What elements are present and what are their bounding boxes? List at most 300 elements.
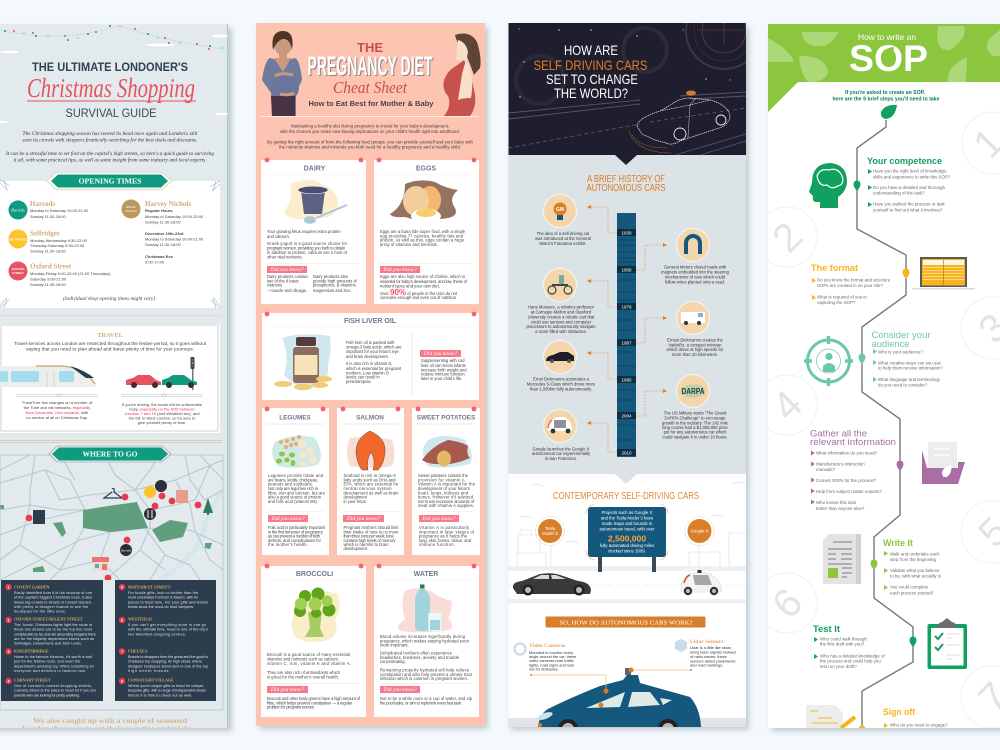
opening note: (Individual shop opening times might vary): [63, 297, 155, 302]
milestone text: Mercedes S-Class which drove more: [527, 382, 596, 386]
banner: opening times: OPENING TIMES: [78, 178, 142, 186]
label: lidar sensors: sensors detect pavements: [690, 658, 735, 663]
milestone text: Hans Moravec, a robotics professor: [528, 304, 595, 310]
panel: travel: [0, 324, 220, 433]
shop: Selfridges: Sunday 11:30-18:00: [30, 248, 67, 254]
panel: where to go map: [0, 446, 223, 710]
card: dairy: in addition to protein, calcium are a host of: [267, 250, 348, 255]
list: left locations: 4: [8, 679, 10, 683]
header: dark hero: [508, 23, 746, 156]
step: test it: [813, 624, 885, 669]
card: salmon: development.: [344, 546, 368, 551]
milestone text: [526, 231, 730, 461]
card: broccoli: Did you know?: [270, 687, 304, 693]
card: dairy: provide high amounts of: [313, 278, 358, 283]
step: test it: Who has a detailed knowledge of: [820, 654, 885, 658]
step: consider your audience: Consider your: [872, 330, 930, 341]
step: the format: SOPs are created in on your site?: [817, 283, 883, 288]
list: right locations: CHELSEA: [128, 648, 147, 654]
step: the format: [811, 263, 891, 305]
shop: Oxford Street: Sunday 11:30-18:00: [30, 282, 67, 287]
shop: Harvey Nichols: Christmas Eve: [145, 254, 174, 259]
panel: self driving cars: [508, 23, 746, 727]
card: broccoli: Broccoli is a good source of many essential: [267, 652, 350, 657]
shop: Selfridges: Selfridges: [30, 230, 60, 238]
icon: sedan: [546, 352, 574, 363]
route line: [854, 105, 916, 731]
card: salmon: EPA, which are essential for: [344, 482, 399, 487]
shop: Selfridges: Monday-Wednesday 9:30-22:00: [30, 238, 88, 243]
milestone text: in San Francisco.: [545, 456, 577, 461]
intro text: By getting the right amount of from the following food groups, you can provide yourself and your baby with: [267, 140, 474, 144]
label: lidar sensors: and road markings.: [690, 662, 723, 668]
travel text: train: There'll be few changes on a number of: [22, 400, 93, 405]
card: salmon: SALMON: [356, 414, 384, 422]
list: left locations: with plenty of designer brands to see the: [14, 605, 88, 609]
card: sweet potatoes: SWEET POTATOES: [417, 414, 476, 422]
card: eggs: Eggs are also high source of choline, which is: [380, 274, 465, 279]
card: dairy: phosphorus, B vitamins,: [313, 283, 357, 288]
card: fish liver oil: which is essential for pregnant: [346, 366, 402, 371]
intro text: seen its crowds with shoppers frantically searching for the best deals and discounts.: [22, 138, 198, 144]
step: write it: step from the beginning: [890, 557, 936, 562]
step: gather information: relevant information: [810, 437, 896, 448]
travel intro: Travel services across London are restricted throughout the festive period, so it goes without: [14, 341, 207, 346]
step: sign off: Sign off: [883, 707, 916, 718]
milestone text: Ernst Dickmanns automates a: [533, 376, 590, 382]
title: How to Eat Best for Mother & Baby: [308, 99, 434, 108]
card: legumes: peanuts and soybeans.: [268, 482, 313, 487]
illustration: salmon: [347, 431, 394, 470]
illustration: woman right: [444, 34, 481, 116]
illustration: yoghurt: [284, 180, 347, 224]
step: consider your audience: What language and terminology: [878, 377, 941, 382]
closing text: We also caught up with a couple of seasoned: [33, 717, 187, 725]
title: [27, 60, 196, 120]
card: salmon: development as well as brain: [344, 490, 399, 495]
card: salmon: which is harmful to brain: [344, 542, 389, 547]
card: salmon: in your fetus.: [344, 499, 367, 504]
panel: pregnancy diet cheat sheet: [256, 23, 485, 726]
milestone text: DARPA Challenge" to encourage: [664, 416, 726, 420]
label: video cameras: angle around the car, these: [529, 654, 576, 659]
title: Cheat Sheet: [333, 78, 408, 97]
card: fish liver oil: reduce immune function: [421, 372, 465, 377]
card: salmon: contains high levels of mercury: [344, 538, 396, 543]
step: test it: Who could walk through: [820, 636, 867, 642]
step: the format: capturing the SOP?: [817, 300, 856, 305]
title: [534, 46, 647, 98]
milestone text: Ernest Dickmanns creates the: [667, 338, 724, 342]
step: consider your audience: audience: [872, 339, 910, 350]
shop: Harvey Nichols: [122, 200, 204, 264]
list: left locations: are for the flagship department stores such as: [14, 637, 94, 641]
milestone text: Google launches the Google X: [532, 446, 590, 452]
card: water: Blood volume increases significantly during: [380, 634, 466, 639]
callout: Google X: Google X: [691, 528, 709, 534]
step: sign off: Who do you need to engage?: [890, 722, 948, 728]
list: left locations: Carnaby Street is the place to head for if you are: [14, 689, 96, 693]
card: dairy: other vital nutrients.: [267, 254, 303, 260]
step: your competence: yourself to find out what it involves?: [873, 208, 943, 212]
shop: Harvey Nichols: Monday to Saturday 10:00-20:00: [145, 214, 204, 219]
travel text: driving: busy, especially on the M25 between: [129, 406, 195, 412]
milestone text: growth in the industry. The 142 mile: [662, 420, 729, 426]
illustration: train: [0, 366, 96, 387]
title: PREGNANCY DIET: [308, 52, 434, 82]
step: your competence: Have you the right level of knowledge,: [873, 168, 947, 174]
map: [0, 455, 223, 581]
closing text: London shoppers to get their own tips and tricks: [22, 725, 192, 733]
list: right locations: [115, 580, 216, 701]
step: sign off: [883, 707, 948, 728]
shop: Harvey Nichols: 9:00-17:00: [145, 260, 165, 264]
step: consider your audience: Who is your audience?: [878, 350, 923, 354]
illustration: eggs: [390, 180, 458, 223]
card: salmon: [337, 407, 404, 555]
list: right locations: most celebrated Fortnum & Mason, with its: [128, 596, 198, 600]
card: salmon: than three cans per week, tuna: [344, 534, 394, 539]
shop: Harrods: Harrods: [10, 208, 25, 212]
card: dairy: Dairy products contain: [267, 274, 308, 279]
milestone text: at Carnegie Mellon and Stanford: [531, 310, 592, 314]
heading: brief history: A BRIEF HISTORY OF: [587, 174, 665, 185]
illustration: blue autonomous car: [508, 668, 746, 739]
list: left locations: of the capital's biggest Christmas trees, it also: [14, 596, 92, 600]
card: fish liver oil: omega-3 fatty acids, which are: [346, 345, 402, 350]
card: sweet potatoes: immune function.: [419, 542, 455, 547]
card: broccoli: They are also rich of antioxidants which: [267, 670, 341, 675]
step: the format: Do you know the format and structure: [817, 278, 891, 282]
fairy lights: [0, 25, 229, 123]
list: left locations: these two streets are to be the top five most: [14, 628, 92, 632]
list: left locations: everyone and delivers in fashion now.: [14, 669, 86, 673]
illustration: legumes: [272, 435, 321, 468]
list: left locations: boutiques for the little ones.: [14, 610, 66, 614]
card: dairy: pregnant women, providing you both to obtain: [267, 246, 346, 250]
card: dairy: vitamins: [267, 283, 282, 288]
card: dairy: Your growing fetus requires extra protein: [267, 229, 341, 234]
step: the format: What is required of you in: [817, 294, 867, 300]
milestone icons: [544, 194, 710, 442]
card: salmon: fatty acids such as DHA and: [344, 477, 396, 482]
milestone text: Motor's Futurama exhibit.: [539, 241, 587, 246]
card: fish liver oil: liver oil can boost infants: [421, 363, 466, 368]
step: your competence: Do you have a detailed and thorough: [873, 185, 946, 190]
road sign: fully automated driving miles: [600, 543, 654, 548]
travel intro: saying that you need to plan ahead and leave plenty of time for your journeys.: [26, 346, 194, 352]
intro text: The Christmas shopping season has reared its head once again and London's still: [22, 132, 198, 137]
list: right locations: designer boutiques stand next to one of the top: [128, 664, 208, 668]
step: write it: Walk and undertake each: [890, 552, 940, 556]
step: gather information: Manufacture's instruction: [816, 462, 865, 466]
card: legumes: Not only are legumes rich in: [268, 486, 319, 491]
card: sweet potatoes: [412, 407, 480, 555]
step: gather information: Gather all the: [810, 428, 867, 440]
header: SOP: [849, 38, 928, 79]
illustration: wireframe car: [629, 90, 730, 153]
list: left locations: OXFORD STREET/REGENT STREET: [14, 616, 83, 622]
milestone text: could navigate it in under 10 hours.: [662, 434, 728, 440]
panel: how to write an SOP: [757, 24, 1000, 731]
list: left locations: 1: [8, 585, 10, 589]
step: gather information: manuals?: [816, 467, 836, 472]
list: left locations: The 'Iconic' Christmas lights light the route in: [14, 623, 92, 627]
icon: van: [681, 312, 705, 325]
card: sweet potatoes: Vitamin A is important for the: [418, 482, 476, 487]
icon: audience target: [804, 336, 853, 386]
card: legumes: Did you know?: [270, 516, 305, 522]
card: water: concentrating.: [380, 659, 406, 664]
timeline: [617, 213, 636, 457]
subtitle: If you're asked to create an SOP,: [845, 90, 925, 96]
list: left locations: draws big crowds to streets of Covent Garden,: [14, 600, 92, 604]
step: consider your audience: to help them receive information?: [878, 366, 943, 370]
list: left locations: parents who are looking for pretty anything.: [14, 693, 80, 697]
card: broccoli: [261, 564, 366, 717]
card: broccoli: problem for pregnant women.: [267, 705, 315, 710]
list: right locations: 5: [121, 585, 123, 589]
shop: Selfridges: SELFRIDGES: [9, 238, 27, 242]
title: Christmas Shopping: [27, 73, 195, 103]
card: salmon: their intake of tuna to no more: [344, 529, 399, 534]
step: test it: Test It: [813, 624, 841, 635]
list: right locations: treats stock the must-do food hampers.: [128, 605, 194, 609]
title: SET TO CHANGE: [546, 71, 638, 87]
label: lidar sensors: of radio waves; these: [690, 654, 727, 659]
list: right locations: pieces to feast here. For your gifts and festive: [128, 600, 208, 604]
card: dairy: Dairy products also: [313, 274, 349, 279]
card: broccoli: fibre, which helps prevent constipation — a regular: [267, 700, 353, 705]
list: left locations: CARNABY STREET: [14, 678, 51, 682]
milestone text: The US Military starts "The Grand: [664, 410, 727, 416]
milestone text: processors to autonomously navigate: [526, 324, 596, 329]
step: test it: the process and could help you: [820, 658, 881, 664]
step: write it: You could complete: [890, 584, 929, 590]
button: how do autonomous cars work: SO, HOW DO AUTONOMOUS CARS WORK?: [560, 620, 693, 626]
milestone text: more than 20 kilometres.: [672, 352, 718, 357]
shop: Harrods: [8, 200, 89, 220]
card: legumes: and folic acid (vitamin B9).: [268, 499, 318, 504]
card: eggs: Eggs are a bona fide super food, with a single: [380, 229, 466, 234]
milestone text: General Motors closed roads with: [664, 264, 727, 270]
step: write it: Validate what you believe: [890, 568, 940, 573]
card: eggs: nutrient types and your own diet.: [380, 284, 440, 288]
card: water: infection which is common in pregnant women.: [380, 676, 468, 681]
intro text: it all, with some practical tips, as well as some insight from some industry and local experts.: [14, 158, 206, 164]
card: dairy: – muscle and ribcage.: [267, 288, 307, 293]
timeline: 1958: [621, 268, 632, 272]
icon: google car: [548, 417, 572, 433]
travel text: driving: If you're driving, the roads will be unfavorable: [122, 402, 203, 407]
step: test it: test run your draft?: [820, 664, 857, 669]
label: video cameras: lights, road signs and look: [529, 662, 574, 668]
icon: light bulb: [554, 202, 566, 220]
card: eggs: egg providing 77 calories, healthy fats and: [380, 233, 464, 238]
shop: Harvey Nichols: Sunday 11:30-18:00: [145, 220, 182, 224]
timeline: 1987: [621, 340, 632, 346]
intro text: Maintaining a healthy diet during pregnancy is crucial for your baby's development,: [291, 124, 449, 128]
milestone text: pot for any autonomous car which: [664, 430, 727, 434]
icon: signed paper: [806, 705, 855, 728]
card: legumes: Legumes provide folate and: [268, 473, 324, 478]
banner: opening times: [47, 172, 172, 190]
travel heading: TRAVEL: [97, 332, 123, 339]
icon: magnet: [686, 236, 700, 254]
callout: Google X: [685, 516, 714, 546]
list: right locations: 7: [121, 650, 123, 654]
callout: Tesla Model S: Tesla: [545, 526, 556, 531]
card: water: constipation and also help prevent a urinary tract: [380, 672, 473, 677]
illustration: sweet potato: [422, 436, 472, 468]
icon: head with brain: [809, 163, 847, 208]
list: left locations: department's amazing toy. Offers something for: [14, 664, 95, 668]
card: sweet potatoes: provision for vitamin A.: [418, 477, 466, 482]
road sign: autonomous travel, with over: [600, 526, 655, 532]
step: gather information: What information do you need?: [816, 450, 878, 456]
shop: Oxford Street: Monday-Friday 9:00-22:00 (21:00 Thursdays): [30, 271, 111, 276]
card: sweet potatoes: meat with Vitamin A supplies.: [418, 503, 474, 508]
road sign: and the Tesla Model 3 have: [601, 516, 654, 520]
list: left locations: 2: [8, 618, 10, 622]
card: legumes: Folic acid is particularly important: [268, 525, 326, 530]
milestone text: a room filled with obstacles.: [535, 329, 587, 334]
list: right locations: CONNAUGHT VILLAGE: [128, 678, 174, 682]
list: left locations: Home to the famous Harrods, it's worth a visit: [14, 655, 92, 659]
large step numbers: 2: [764, 214, 811, 261]
card: fish liver oil: later in your child's life.: [421, 376, 462, 381]
label: lidar sensors: using laser signals instead: [690, 650, 736, 654]
timeline: 1995: [621, 378, 632, 382]
timeline: 2004: [621, 414, 632, 418]
card: fish liver oil: It is also rich in vitamin D,: [346, 361, 392, 366]
label: video cameras: out for obstacles.: [529, 666, 559, 672]
shop: Harvey Nichols: Sunday 11:30-18:00: [145, 242, 182, 247]
list: left locations: KNIGHTSBRIDGE: [14, 648, 49, 654]
step: write it: Write It: [883, 538, 914, 549]
icon: document: [823, 534, 861, 584]
timeline: 1979: [621, 304, 632, 310]
road sign: clocked since 2009.: [608, 548, 646, 554]
list: right locations: two Westfield shopping centres.: [128, 632, 186, 636]
step: your competence: [867, 156, 951, 212]
card: fish liver oil: [262, 312, 479, 400]
card: eggs: essential for baby's development, and low, these of: [380, 279, 468, 284]
illustration: cars and traffic light: [126, 357, 197, 390]
ornament dividers: [16, 394, 203, 398]
milestone text: than 1,000km fully autonomously.: [530, 386, 592, 392]
title: THE WORLD?: [554, 85, 628, 101]
step: gather information: Help from subject matter experts?: [816, 489, 882, 494]
label: lidar sensors: [675, 639, 736, 668]
card: eggs: consume enough and even out of nutrition: [380, 295, 457, 300]
shop: Selfridges: Thursday-Saturday 9:30-22:00: [30, 243, 85, 248]
button: how do autonomous cars work: [546, 616, 706, 628]
step: gather information: [810, 428, 896, 511]
card: salmon: Did you know?: [346, 516, 380, 522]
card: broccoli: Broccoli and other leafy greens have a high amount of: [267, 696, 361, 701]
icon: tablet document: [912, 257, 975, 290]
icon: folder: [922, 442, 965, 484]
list: right locations: high street brands.: [128, 669, 170, 673]
timeline: 2010: [621, 450, 632, 456]
card: legumes: defects, and complications for: [268, 538, 322, 543]
connectors: [590, 207, 663, 452]
card: dairy: DAIRY: [304, 166, 326, 172]
card: water: Dehydrated mothers often experience: [380, 650, 453, 656]
travel text: train: [22, 400, 93, 420]
milestone text: The idea of a self-driving car: [537, 231, 590, 236]
list: right locations: with the ultimate time, head to one of the city's: [128, 628, 208, 632]
heading: brief history: AUTONOMOUS CARS: [586, 183, 666, 194]
card: water: headaches, tiredness, anxiety and trouble: [380, 655, 460, 660]
banner: where to go: WHERE TO GO: [82, 450, 138, 458]
card: legumes: LEGUMES: [279, 414, 312, 422]
travel text: train: no service at all on Christmas Day.: [26, 415, 88, 420]
card: legumes: [262, 407, 329, 555]
shop: Oxford Street: OXFORD: [12, 267, 25, 271]
card: eggs: [374, 158, 479, 304]
subtitle: here are the 9 brief steps you'll need to take: [832, 96, 940, 102]
card: fish liver oil: FISH LIVER OIL: [344, 318, 397, 325]
list: left locations: just for the festive room, and even the: [13, 660, 80, 664]
milestone text: could use sensors and computer: [531, 320, 592, 324]
card: eggs: Over 90% of people in the USA do not: [380, 288, 458, 297]
list: right locations: Where you'd unique gifts to head for unique,: [128, 684, 204, 688]
card: dairy: magnesium and zinc.: [313, 288, 352, 293]
shop: Oxford Street: [8, 262, 111, 287]
milestone text: magnets embedded into the steering: [661, 270, 730, 274]
card: sweet potatoes: important in later stages of: [419, 529, 475, 534]
card: eggs: Did you know?: [382, 267, 417, 273]
card: broccoli: BROCCOLI: [296, 571, 333, 578]
shop: Harrods: Monday to Saturday 10:00-21:00: [30, 208, 89, 213]
list: right locations: Chelsea's top shopping. Its high street, where: [128, 660, 202, 664]
subtitle: [832, 90, 940, 102]
intro text: [267, 124, 474, 150]
card: fish liver oil: increase birth weight and: [421, 367, 467, 372]
large step numbers: 4: [764, 382, 811, 429]
milestone text: long course had a $1,000,000 prize: [662, 425, 728, 430]
list: left locations: 3: [8, 650, 10, 654]
list: right locations: Brands to shoppers from the great and the good is: [128, 655, 208, 659]
illustration: broccoli: [292, 588, 339, 642]
step: your competence: Your competence: [867, 156, 942, 167]
shop: Harrods: Harrods: [30, 200, 55, 208]
step: write it: each process yourself: [890, 590, 933, 596]
milestone text: autonomous car experimentally: [532, 451, 591, 456]
card: water: pregnancy, which makes staying hydrated even: [380, 638, 470, 643]
shop: Oxford Street: Saturday 9:00-21:00: [30, 276, 67, 282]
list: left locations: [1, 580, 103, 701]
shop: Selfridges: [8, 230, 88, 254]
card: sweet potatoes: Sweet potatoes contain the: [418, 473, 469, 478]
card: eggs: EGGS: [416, 166, 436, 172]
card: legumes: fibre, iron and calcium, but are: [268, 490, 326, 495]
shop: Oxford Street: Oxford Street: [30, 262, 72, 270]
step: write it: to be, with what actually is: [890, 574, 942, 578]
milestone text: University creates a robotic cart that: [528, 314, 595, 320]
label: video cameras: Mounted to monitor every: [529, 650, 573, 655]
road sign: made leaps and bounds in: [602, 521, 653, 526]
illustration: google car: [681, 570, 722, 595]
illustration: water bottle: [398, 584, 452, 632]
map markers: [26, 480, 213, 581]
list: right locations: bespoke gifts, with a range of independent shops: [128, 689, 206, 693]
shop: Harvey Nichols: Harvey Nichols: [145, 200, 191, 208]
title: SELF DRIVING CARS: [534, 57, 648, 73]
card: water: the pool tasks, or aim to replenish every last task.: [380, 700, 462, 705]
